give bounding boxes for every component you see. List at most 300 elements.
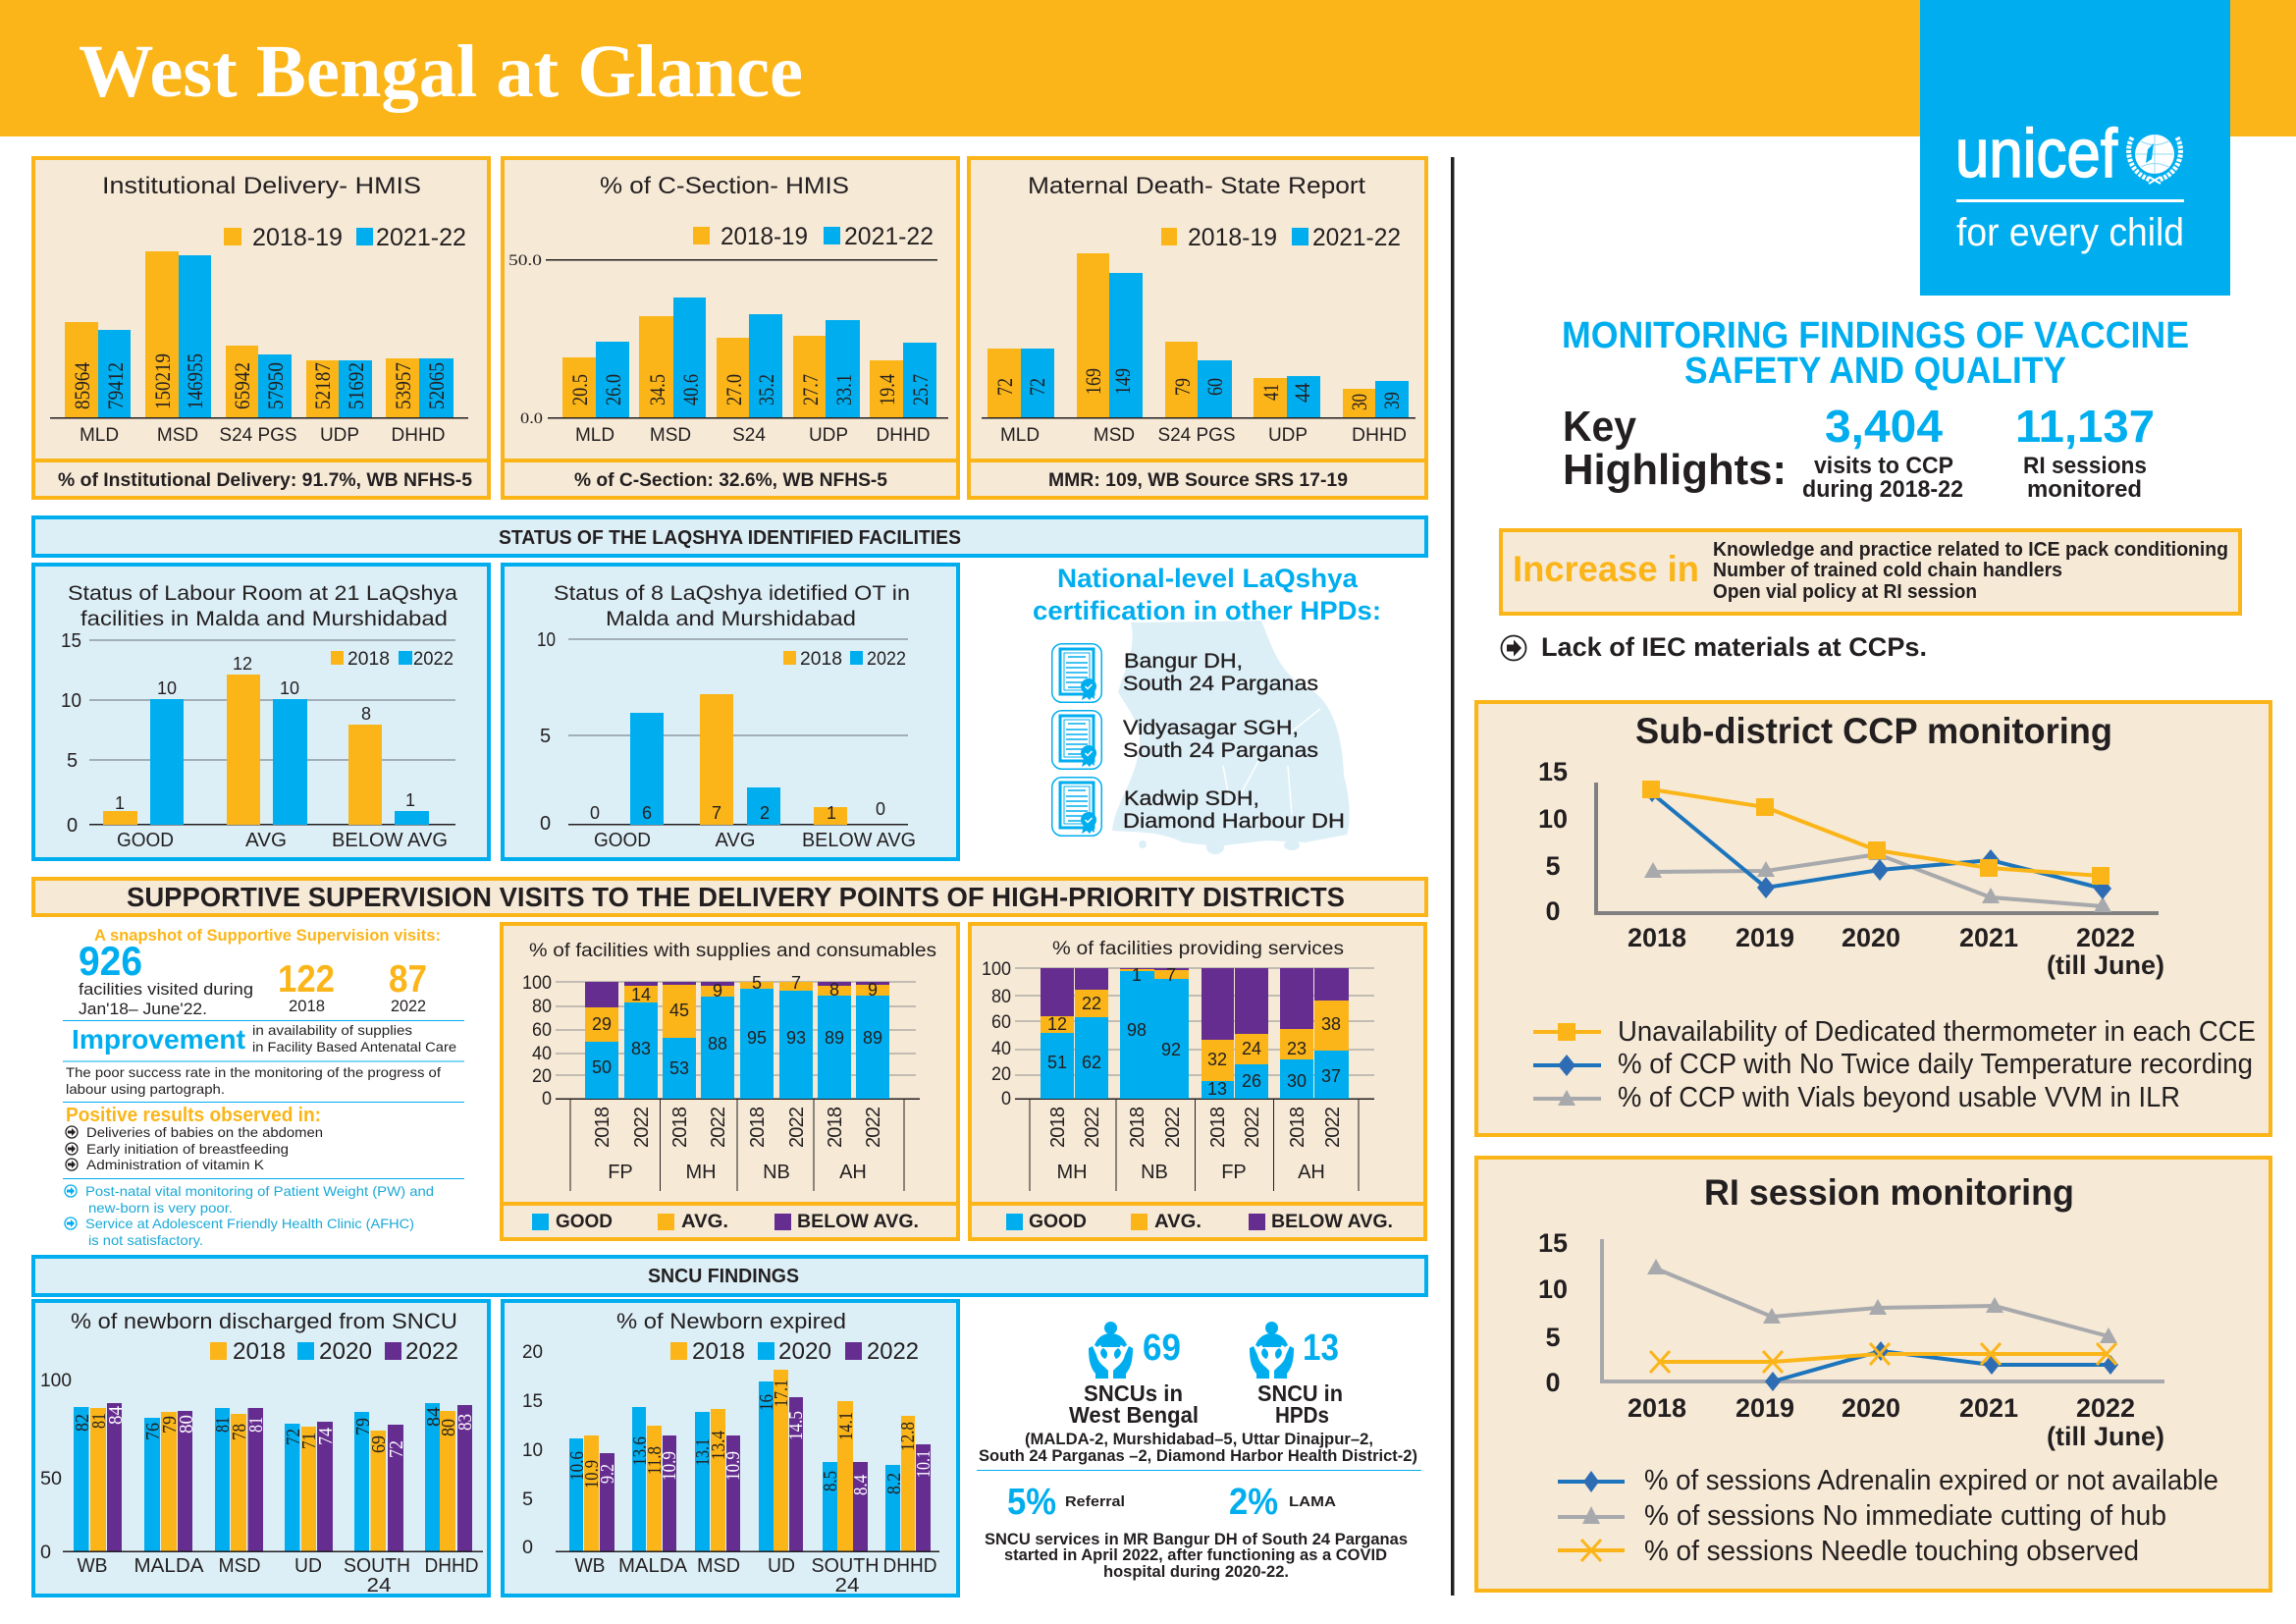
stat: 11,137 sessions [2015, 401, 2155, 503]
legend [224, 224, 466, 251]
heading: A snapshot of Supportive Supervision visits: [94, 926, 441, 945]
district breakdown [979, 1430, 1417, 1465]
bar chart: 40.6 [678, 374, 703, 406]
partograph note: labour using partograph. [66, 1081, 225, 1097]
heading: Supportive supervision banner: SUPPORTIVE SUPERVISION VISITS TO THE DELIVERY POINTS OF HIGH-PRIORITY DISTRICTS [127, 882, 1345, 912]
bar chart: 39 [1379, 392, 1404, 409]
bar chart: 20.5 [567, 374, 592, 406]
stacked bar chart: 89 [863, 1028, 882, 1048]
heading: SNCU banner: SNCU FINDINGS [648, 1266, 799, 1287]
panel: C-Section [501, 158, 960, 498]
bar chart: DHHD [883, 1555, 936, 1577]
stacked bar chart: 80 [532, 997, 552, 1017]
legend [210, 1338, 458, 1365]
stacked bar chart: 2018 [1287, 1107, 1308, 1148]
stat: 926 facilities: Jan'18– June'22. [79, 1000, 207, 1018]
bar chart: 6 [642, 803, 652, 823]
legend: % of sessions Adrenalin expired or not available [1644, 1465, 2218, 1496]
unicef logo: for every child [1956, 211, 2184, 254]
legend: 2021-22 [844, 223, 934, 250]
key highlights label: Highlights: [1563, 446, 1787, 494]
bar chart: WB [77, 1555, 108, 1577]
positive results list: Early initiation of breastfeeding [86, 1141, 289, 1157]
stacked bar chart: 2022 [1082, 1107, 1103, 1148]
stacked bar chart: 50 [592, 1057, 612, 1077]
bar chart: MLD [1000, 425, 1040, 446]
stat: 926 facilities: facilities visited during [79, 980, 253, 999]
legend: 2018 [692, 1338, 745, 1365]
line chart: 10 [1538, 804, 1568, 834]
stat: 11,137 sessions: 11,137 [2015, 401, 2155, 452]
stacked bar chart: 2018 [1207, 1107, 1229, 1148]
stat: 11,137 sessions: monitored [2027, 476, 2142, 503]
bar chart: 8.5 [820, 1471, 841, 1491]
stacked bar chart: 2022 [708, 1107, 729, 1148]
stacked bar chart: 0 [542, 1089, 552, 1110]
panel: newborn discharged [33, 1301, 489, 1597]
bar chart: 65942 [230, 362, 254, 409]
bar chart: 72 [386, 1440, 407, 1458]
stacked bar chart: 2018 [825, 1107, 846, 1148]
stat: 13 SNCUs in HPDs: 13 [1303, 1327, 1339, 1369]
line chart [1538, 1228, 2164, 1451]
stacked bar chart: 93 [786, 1028, 806, 1048]
callout: increase in: Number of trained cold chain handlers [1713, 560, 2062, 581]
heading [554, 582, 910, 630]
stacked bar chart: 100 [982, 959, 1011, 980]
stat: 3,404 visits [1802, 401, 1963, 503]
line chart: 2022 [2076, 1393, 2135, 1423]
bar chart [50, 251, 468, 446]
stacked bar chart: 2018 [592, 1107, 614, 1148]
heading: facilities in Malda and Murshidabad [80, 608, 448, 630]
bar chart: 19.4 [875, 374, 899, 406]
bar chart: 10.9 [722, 1451, 744, 1481]
bar chart: DHHD [1352, 425, 1407, 446]
heading: LaQshya banner [33, 517, 1426, 556]
bar chart: 72 [1025, 378, 1049, 396]
heading [68, 582, 457, 630]
line chart: 10 [1538, 1274, 1568, 1304]
bar chart: 100 [40, 1371, 72, 1391]
bar chart: 0 [876, 799, 885, 819]
legend [1558, 1465, 2218, 1567]
bar chart: 14.5 [785, 1411, 807, 1440]
legend: 2022 [405, 1338, 458, 1365]
panel: snapshot of supervision visits [63, 926, 464, 1248]
bar chart: 7 [712, 803, 721, 823]
text: Bangur DH [1123, 650, 1318, 695]
bar chart: 17.1 [771, 1380, 792, 1407]
stacked bar chart: MH [1056, 1162, 1088, 1183]
legend: 2018-19 [252, 224, 343, 251]
bar chart: SOUTH [344, 1555, 410, 1577]
stacked bar chart: 60 [532, 1020, 552, 1041]
legend: 2018 [233, 1338, 286, 1365]
heading: Institutional Delivery- HMIS [102, 173, 421, 199]
stacked bar chart: 98 [1127, 1020, 1147, 1040]
bar chart: 81 [245, 1417, 267, 1433]
text: Kadwip SDH [1123, 787, 1345, 833]
bar chart: 0 [67, 815, 78, 837]
bar chart: 16 [756, 1394, 777, 1411]
heading: % of newborn discharged from SNCU [71, 1309, 457, 1333]
bar chart: 79 [352, 1418, 374, 1435]
bar chart: 0 [522, 1538, 533, 1558]
bar chart: S24 [732, 425, 766, 446]
stacked bar chart: 89 [825, 1028, 844, 1048]
legend [1533, 1016, 2256, 1113]
heading: Status of Labour Room at 21 LaQshya [68, 582, 457, 605]
bar chart: 149 [1110, 368, 1135, 395]
heading [1033, 564, 1381, 625]
line chart: 2019 [1735, 1393, 1794, 1423]
legend: 2018 [347, 649, 390, 670]
bar chart [537, 629, 916, 851]
bar chart: 146955 [183, 353, 207, 409]
bar chart: WB [575, 1555, 605, 1577]
stat: 69 SNCUs [1069, 1327, 1199, 1428]
line chart: 0 [1545, 1368, 1561, 1397]
line chart: 5 [1545, 1323, 1561, 1352]
improvement note: Improvement [72, 1024, 245, 1055]
central divider [1451, 157, 1455, 1596]
stat: 69 SNCUs: West Bengal [1069, 1402, 1199, 1428]
bar chart: MSD [218, 1555, 261, 1577]
stacked bar chart: 12 [1047, 1014, 1067, 1034]
bar chart: 74 [315, 1428, 337, 1445]
bar chart: 5 [522, 1489, 533, 1510]
bar chart: 81 [88, 1413, 110, 1429]
poor results list: Service at Adolescent Friendly Health Clinic (AFHC) [85, 1216, 414, 1231]
bar chart: 84 [423, 1407, 445, 1427]
bar chart: 10.6 [566, 1451, 588, 1481]
stat: 122 in 2018 [278, 958, 335, 1015]
bar chart: 13.1 [692, 1438, 714, 1466]
bar chart: 8 [361, 704, 371, 724]
text: Bangur DH: South 24 Parganas [1123, 673, 1318, 695]
panel: SNCU key figures [977, 1322, 1421, 1581]
legend: 2018-19 [721, 223, 808, 250]
stacked bar chart: 2022 [1322, 1107, 1344, 1148]
bar chart [982, 253, 1415, 446]
stacked bar chart: 20 [991, 1064, 1011, 1085]
panel: National-level certification [1033, 564, 1381, 854]
line chart: 15 [1538, 1228, 1568, 1258]
improvement note: in availability of supplies [252, 1022, 412, 1038]
bar chart: 76 [142, 1423, 164, 1440]
legend [1161, 224, 1401, 251]
stacked bar chart: 80 [991, 987, 1011, 1007]
stacked bar chart: 45 [669, 1001, 689, 1020]
legend: 2021-22 [376, 224, 466, 251]
legend: 2022 [867, 649, 906, 670]
stat: 13 SNCUs in HPDs: HPDs [1275, 1402, 1329, 1428]
panel: OT status [503, 565, 958, 859]
bar chart: 10 [522, 1440, 543, 1461]
panel: sub-district CCP monitoring [1476, 702, 2270, 1135]
bar chart: 53957 [391, 362, 415, 409]
bar chart: 8.2 [883, 1473, 905, 1494]
stacked bar chart: FP [608, 1162, 633, 1183]
stacked bar chart: 2018 [669, 1107, 691, 1148]
legend: AVG. [1154, 1212, 1201, 1232]
positive results list: Positive results observed in: [66, 1105, 321, 1126]
bar chart: AVG [245, 830, 287, 851]
stacked bar chart [522, 973, 920, 1191]
bar chart: 27.0 [721, 374, 746, 406]
bar chart: 34.5 [645, 374, 669, 406]
bar chart: 72 [283, 1429, 304, 1445]
bar chart: MALDA [618, 1555, 688, 1577]
note: MR Bangur DH: hospital during 2020-22. [1103, 1562, 1289, 1581]
bar chart: 72 [992, 378, 1017, 396]
bar chart: 14.1 [835, 1412, 857, 1440]
stacked bar chart: 92 [1161, 1040, 1181, 1059]
bar chart: GOOD [594, 830, 651, 851]
stacked bar chart: 23 [1287, 1039, 1307, 1058]
stat: 926 facilities: 926 [79, 938, 142, 984]
bar chart: 13.4 [708, 1431, 729, 1460]
stat: 122 in 2018: 2018 [289, 997, 325, 1015]
bar chart: DHHD [392, 425, 445, 446]
bar chart: 69 [368, 1435, 390, 1453]
stacked bar chart: 14 [631, 985, 651, 1004]
legend: 2018 [800, 649, 842, 670]
line chart: (till June) [2047, 950, 2164, 980]
district breakdown: (MALDA-2, Murshidabad–5, Uttar Dinajpur–2, [1025, 1430, 1373, 1448]
line chart: 2020 [1842, 1393, 1900, 1423]
stat: 11,137 sessions: RI sessions [2023, 453, 2147, 479]
partograph note: The poor success rate in the monitoring of the progress of [66, 1064, 441, 1080]
icon: certificate 1 [1052, 644, 1101, 702]
bar chart: DHHD [424, 1555, 479, 1577]
legend: GOOD [556, 1212, 613, 1232]
stacked bar chart: 53 [669, 1058, 689, 1078]
bar chart: 20 [522, 1342, 543, 1363]
district breakdown: South 24 Parganas –2, Diamond Harbor Health District-2) [979, 1446, 1417, 1465]
heading: SNCU banner [33, 1257, 1426, 1295]
bar chart: 10 [61, 690, 81, 712]
legend: AVG. [681, 1212, 728, 1232]
bar chart: 52187 [310, 362, 335, 409]
icon: caring hands 1 [1089, 1322, 1133, 1379]
bar chart: 25.7 [908, 374, 933, 406]
bar chart: 1 [827, 803, 836, 823]
legend: % of CCP with Vials beyond usable VVM in ILR [1618, 1082, 2180, 1113]
legend: 2018-19 [1188, 224, 1277, 251]
stacked bar chart: 22 [1082, 994, 1101, 1013]
stacked bar chart: 7 [1166, 965, 1176, 985]
stacked bar chart: AH [1298, 1162, 1325, 1183]
icon: certificate 3 [1052, 778, 1101, 836]
legend [670, 1338, 919, 1365]
bar chart: 84 [105, 1406, 127, 1425]
heading: Maternal Death- State Report [1028, 173, 1365, 199]
legend: BELOW AVG. [1271, 1212, 1393, 1232]
bar chart: 51692 [344, 362, 368, 409]
stacked bar chart: 88 [708, 1034, 727, 1054]
bar chart: 79 [1170, 378, 1195, 396]
bar chart: 9.2 [597, 1464, 618, 1484]
bar chart [522, 1342, 939, 1597]
legend: 2022 [413, 649, 454, 670]
bar chart: 80 [176, 1415, 197, 1434]
panel: supplies and consumables [500, 924, 960, 1239]
bar chart: 52065 [424, 362, 449, 409]
positive results list: Administration of vitamin K [86, 1157, 265, 1172]
stacked bar chart: 60 [991, 1012, 1011, 1033]
panel: Labour Room status [33, 565, 489, 859]
bar chart: S24 PGS [219, 425, 297, 446]
stacked bar chart: 5 [752, 973, 762, 993]
line chart: 2018 [1628, 1393, 1686, 1423]
stacked bar chart: 37 [1321, 1066, 1341, 1086]
bar chart: MSD [157, 425, 198, 446]
heading: certification in other HPDs: [1033, 596, 1381, 625]
bar chart: 15 [522, 1391, 543, 1412]
stat: 3,404 visits: 3,404 [1825, 401, 1943, 452]
bar chart: UDP [809, 425, 848, 446]
stat: 926 facilities [79, 938, 253, 1018]
stat: 69 SNCUs: 69 [1143, 1327, 1181, 1369]
bar chart: 71 [298, 1433, 320, 1449]
bar chart: 50.0 [508, 252, 542, 269]
bar chart: 10 [280, 678, 299, 698]
stacked bar chart: 62 [1082, 1053, 1101, 1072]
legend: BELOW AVG. [797, 1212, 919, 1232]
text: Kadwip SDH: Kadwip SDH, [1124, 787, 1259, 810]
partograph note [66, 1064, 441, 1097]
bar chart: 5 [540, 726, 551, 747]
line chart: 15 [1538, 757, 1568, 786]
bar chart: 24 [834, 1575, 860, 1597]
heading: Malda and Murshidabad [606, 608, 856, 630]
stacked bar chart: AH [839, 1162, 867, 1183]
heading: vaccine monitoring: MONITORING FINDINGS OF VACCINE [1562, 315, 2189, 356]
stacked bar chart: 2022 [1242, 1107, 1263, 1148]
line chart [1538, 757, 2164, 980]
bar chart: 44 [1290, 383, 1314, 403]
callout: increase in [1501, 530, 2240, 614]
legend: 2020 [778, 1338, 831, 1365]
bar chart: 11.8 [644, 1446, 666, 1475]
heading: vaccine monitoring [1562, 315, 2189, 392]
stacked bar chart: 24 [1242, 1039, 1261, 1058]
line chart: 2021 [1959, 1393, 2018, 1423]
stacked bar chart: 40 [991, 1039, 1011, 1059]
bar chart: 82 [72, 1414, 93, 1432]
stat: 87 in 2022 [389, 958, 427, 1015]
line chart: (till June) [2047, 1422, 2164, 1451]
stacked bar chart: MH [685, 1162, 717, 1183]
bar chart: MLD [80, 425, 119, 446]
bar chart: 10.9 [581, 1460, 603, 1489]
bar chart: 33.1 [831, 374, 856, 406]
stacked bar chart: NB [1141, 1162, 1168, 1183]
bar chart: 0 [590, 803, 600, 823]
stat: 2% LAMA: LAMA [1289, 1493, 1336, 1510]
legend [532, 1212, 919, 1232]
bar chart: 169 [1081, 368, 1105, 395]
note: lack of IEC materials: Lack of IEC materials at CCPs. [1541, 632, 1927, 662]
stat: 5% referral: Referral [1065, 1493, 1125, 1510]
text: Kadwip SDH: Diamond Harbour DH [1123, 810, 1345, 833]
improvement note: in Facility Based Antenatal Care [252, 1039, 456, 1055]
stacked bar chart: 100 [522, 973, 552, 994]
stacked bar chart: 20 [532, 1066, 552, 1087]
stat: 13 SNCUs in HPDs [1257, 1327, 1343, 1428]
line chart: 2022 [2076, 923, 2135, 952]
stacked bar chart: 9 [713, 981, 722, 1001]
legend: % of sessions Needle touching observed [1644, 1536, 2139, 1567]
bar chart: 85964 [70, 362, 94, 409]
poor results list: Post-natal vital monitoring of Patient Weight (PW) and [85, 1183, 434, 1199]
bar chart: 12.8 [897, 1422, 919, 1451]
heading: Status of 8 LaQshya idetified OT in [554, 582, 910, 605]
bar chart: 10 [157, 678, 177, 698]
stacked bar chart: 2022 [1162, 1107, 1184, 1148]
heading: RI session monitoring [1704, 1172, 2074, 1213]
stacked bar chart: 8 [829, 980, 839, 1000]
callout: increase in: Open vial policy at RI session [1713, 581, 1977, 603]
improvement note [72, 1022, 456, 1055]
bar chart: UDP [1268, 425, 1308, 446]
stacked bar chart: 83 [631, 1039, 651, 1058]
stacked bar chart: 2018 [1127, 1107, 1148, 1148]
panel: Maternal Death [967, 158, 1428, 498]
footer note: MMR: 109, WB Source SRS 17-19 [1048, 470, 1348, 491]
stacked bar chart: 26 [1242, 1071, 1261, 1091]
stat: 3,404 visits: visits to CCP [1814, 453, 1953, 479]
bar chart: BELOW AVG [332, 830, 448, 851]
bar chart: MALDA [133, 1555, 204, 1577]
line chart: 0 [1545, 896, 1561, 926]
bar chart: 10 [537, 629, 556, 651]
stat: 2% LAMA [1229, 1482, 1336, 1523]
stacked bar chart: 51 [1047, 1053, 1067, 1072]
bar chart: SOUTH [811, 1555, 880, 1577]
heading: vaccine monitoring: SAFETY AND QUALITY [1684, 351, 2066, 392]
icon: caring hands 2 [1250, 1322, 1294, 1379]
bar chart: 1 [115, 793, 125, 813]
bar chart: MSD [1094, 425, 1135, 446]
legend [331, 649, 454, 670]
bar chart: 13.6 [629, 1436, 651, 1466]
stacked bar chart: 29 [592, 1014, 612, 1034]
line chart: 2018 [1628, 923, 1686, 952]
bar chart: 57950 [263, 362, 288, 409]
bar chart: BELOW AVG [802, 830, 916, 851]
bar chart: GOOD [117, 830, 174, 851]
bar chart: 0 [540, 813, 551, 835]
stacked bar chart: NB [763, 1162, 790, 1183]
bar chart: 0 [40, 1543, 51, 1563]
bar chart: 1 [405, 790, 415, 810]
line chart: 5 [1545, 851, 1561, 881]
unicef logo: unicef [1955, 115, 2117, 191]
map backdrop [1112, 621, 1350, 854]
bar chart: AVG [715, 830, 756, 851]
bar chart: 60 [1202, 378, 1227, 396]
bar chart [40, 1371, 483, 1597]
bar chart: 79 [159, 1416, 181, 1434]
bar chart: 12 [233, 654, 252, 674]
bar chart: 80 [438, 1419, 459, 1436]
legend: % of CCP with No Twice daily Temperature recording [1618, 1049, 2253, 1080]
stacked bar chart: 7 [791, 973, 801, 993]
note: MR Bangur DH [985, 1530, 1408, 1581]
